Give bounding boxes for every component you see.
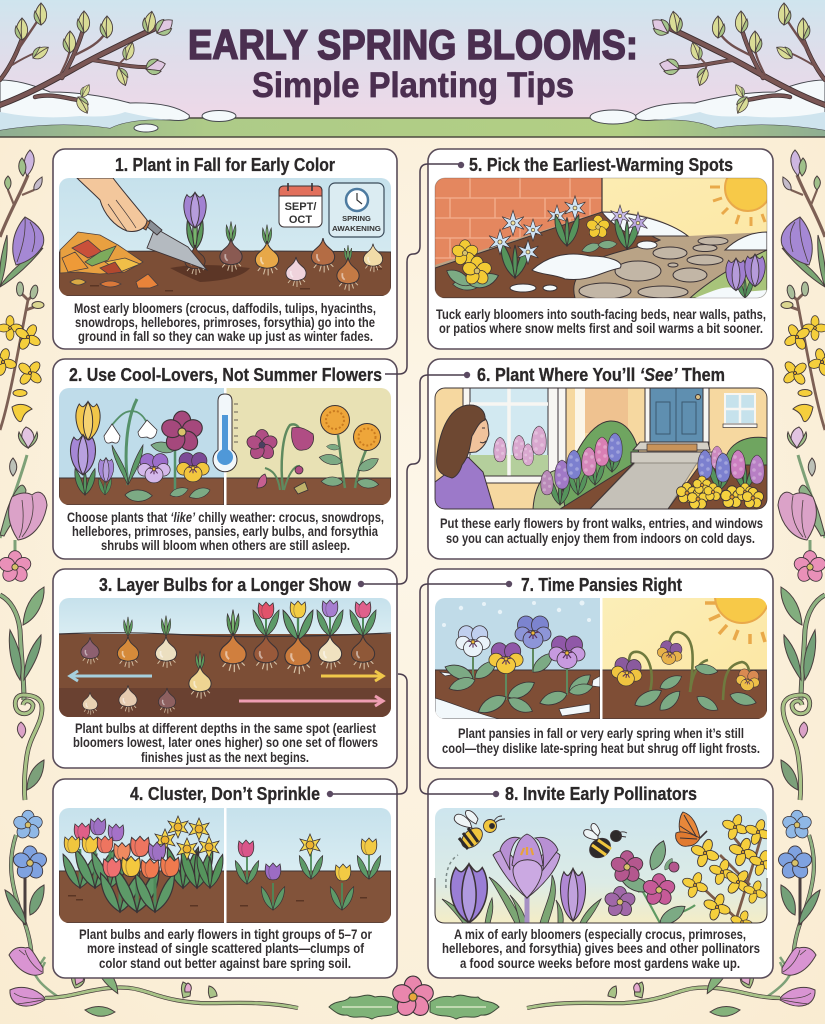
branch left [0,3,177,116]
body text 2: Choose plants that ‘like’ chilly weather: crocus, snowdrops, [67,510,426,525]
illustration 1: SEPT/ [285,201,316,213]
bee 2 [584,823,627,862]
big crocus [493,834,560,898]
panel 2: cool lovers [53,359,397,559]
ground [435,212,767,298]
heading 4: 4. Cluster, Don’t Sprinkle [130,783,320,804]
body text 3: Plant bulbs at different depths in the same spot (earliest [75,721,376,736]
body text 8: hellebores, and forsythia) gives bees and other pollinators [442,941,760,956]
branch right [648,3,825,116]
illustration 2 [59,388,391,505]
body text 3: bloomers lowest, later ones higher) so one set of flowers [73,735,378,750]
body text 2: shrubs will bloom when others are still asleep. [101,538,350,553]
tulip clump back [63,849,97,888]
snow patches [510,241,657,292]
bee 1 [454,810,505,852]
winter aconites and stars [452,282,477,290]
header banner [0,0,825,137]
crocus leaves [442,875,601,923]
heading 6: 6. Plant Where You’ll ‘See’ Them [477,364,725,385]
illustration 6 [435,388,767,509]
scattered plants [235,857,259,884]
clock box: AWAKENING [332,224,381,233]
body text 6: Put these early flowers by front walks, entries, and windows [440,516,763,531]
cool flowers [126,399,137,485]
body text 4: color stand out better against bare spring soil. [99,956,351,971]
snow right [590,80,825,130]
clock box [329,183,384,237]
trowel [142,219,208,271]
hand [77,178,147,231]
shrubs [560,421,640,509]
left floral border [0,150,298,1016]
arrows [70,671,383,706]
heading 2: 2. Use Cool-Lovers, Not Summer Flowers [69,364,382,385]
sun [710,187,765,226]
body text 1: ground in fall so they can wake up just as winter fades. [78,329,373,344]
connector lines [327,162,512,797]
bulbs [185,245,205,275]
wilted summer flowers [282,424,302,490]
panel 8: pollinators [428,779,779,978]
body text 4: more instead of single scattered plants—clumps of [87,941,364,956]
stones [579,237,728,299]
title: EARLY SPRING BLOOMS: [188,21,638,68]
calendar [279,183,322,227]
woman [435,405,494,509]
subtitle: Simple Planting Tips [252,66,574,105]
heading 7: 7. Time Pansies Right [521,574,682,595]
crocus [194,225,196,246]
heading 1: 1. Plant in Fall for Early Color [115,154,335,175]
bee path [446,855,458,888]
sun [705,603,765,644]
snow left [0,80,236,132]
body text 8: A mix of early bloomers (especially crocus, primroses, [454,927,746,942]
panel 7: time pansies [428,569,773,768]
illustration 3 [59,598,391,717]
body text 6: so you can actually enjoy them from indoors on cold days. [446,531,755,546]
clock box: SPRING [342,214,371,223]
small window [726,395,754,423]
heading 8: 8. Invite Early Pollinators [505,783,697,804]
illustration 4 [59,808,391,923]
cool pansies [473,645,567,700]
leaf pile [60,232,158,288]
forsythia [700,830,763,923]
brick wall [435,178,602,265]
panel 4: cluster [53,779,397,978]
hellebores [630,870,695,923]
body text 2: hellebores, primroses, pansies, early bulbs, and forsythia [72,524,378,539]
wilted pansies [628,632,749,700]
door [645,388,709,446]
body text 7: cool—they dislike late-spring heat but shrug off light frosts. [442,741,760,756]
heading 5: 5. Pick the Earliest-Warming Spots [469,154,733,175]
body text 7: Plant pansies in fall or very early spring when it’s still [458,726,744,741]
body text 4: Plant bulbs and early flowers in tight groups of 5–7 or [79,927,373,942]
steps and walk [633,442,710,450]
bottom centre flower with leaves [329,976,499,1019]
illustration 7 [435,598,767,719]
body text 8: a food source weeks before most gardens wake up. [460,956,740,971]
body text 3: finishes just as the next begins. [141,750,309,765]
panel 1: plant in fall [53,149,397,349]
body text 5: or patios where snow melts first and soil warms a bit sooner. [439,321,763,336]
panel 5: warming spots [428,149,773,349]
thermometer [213,394,238,472]
right floral border [527,150,825,1016]
panel 3: layer bulbs [53,569,397,768]
illustration 1: OCT [289,214,312,226]
illustration 8 [435,808,779,937]
body text 1: Most early bloomers (crocus, daffodils, tulips, hyacinths, [74,301,376,316]
butterfly [676,812,707,846]
panel 6: where you'll see them [428,359,773,559]
heading 3: 3. Layer Bulbs for a Longer Show [99,574,352,595]
side crocuses [451,864,487,923]
title [188,21,638,105]
body text 1: snowdrops, hellebores, primroses, forsythia) go into the [75,315,375,330]
illustration 5 [435,178,767,298]
hyacinth beds [551,482,570,506]
illustration 1 [59,178,391,296]
window with woman's view [462,388,558,472]
